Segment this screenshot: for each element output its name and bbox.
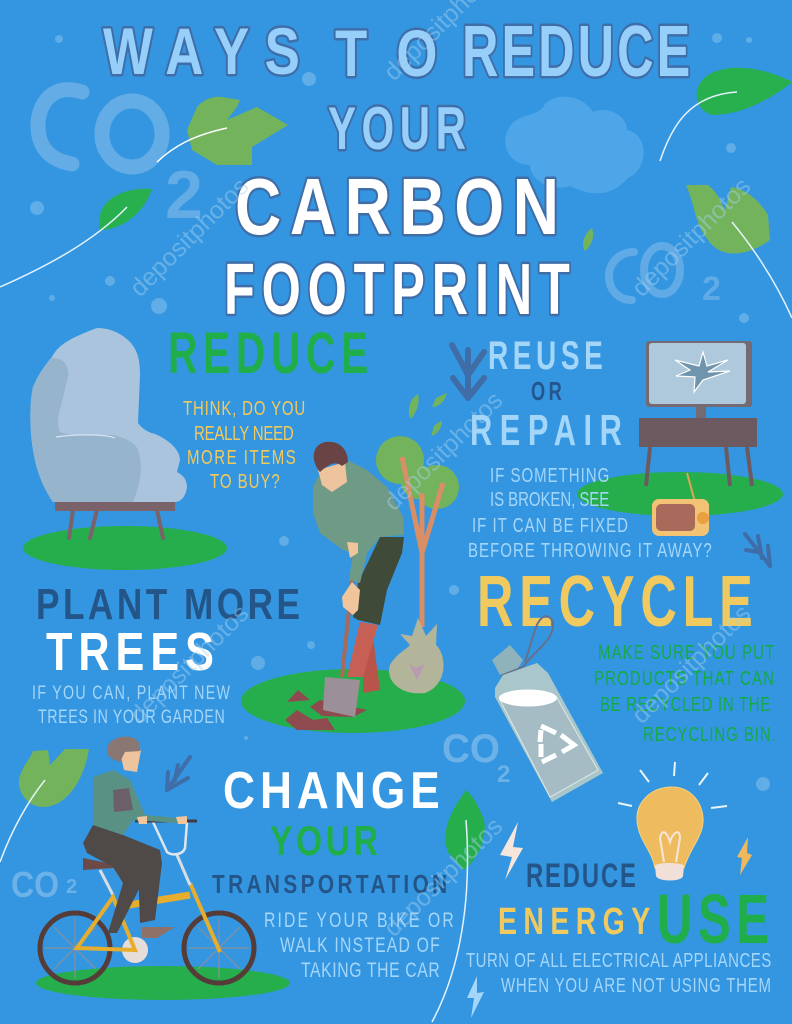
icon: tv on table	[577, 341, 783, 516]
co2 watermark right	[609, 246, 721, 308]
heading: reduce: REDUCE	[168, 321, 368, 386]
heading: change your transportation	[212, 762, 447, 899]
heading: reduce energy use: REDUCE	[526, 857, 636, 895]
co2 watermark right: 2	[702, 270, 721, 308]
text: transportation: RIDE YOUR BIKE OR	[264, 908, 454, 932]
icon: plant leaves	[409, 393, 447, 436]
leaf small left with stem	[0, 189, 152, 287]
depositphotos watermarks: depositphotos	[378, 812, 508, 942]
text: transportation: WALK INSTEAD OF	[280, 933, 440, 957]
heading: reduce energy use: ENERGY	[498, 901, 650, 943]
heading: change your transportation: YOUR	[270, 819, 378, 865]
text: repair: BEFORE THROWING IT AWAY?	[468, 539, 712, 562]
leaf right with stem	[686, 185, 792, 318]
heading: reduce energy use: USE	[657, 879, 769, 958]
title: FOOTPRINT	[224, 250, 570, 330]
heading: change your transportation: TRANSPORTATION	[212, 870, 447, 899]
heading: plant more trees: TREES	[46, 623, 214, 682]
heading: reuse or repair	[470, 334, 622, 455]
icon: dark plant right	[745, 534, 770, 566]
text: repair: IF IT CAN BE FIXED	[472, 514, 628, 537]
icon: lightning bolts	[467, 822, 752, 1018]
text: energy	[466, 949, 771, 997]
text: recycle: PRODUCTS THAT CAN	[594, 667, 774, 690]
armchair illustration	[23, 328, 227, 570]
text: repair	[468, 464, 712, 562]
heading: change your transportation: CHANGE	[223, 762, 440, 820]
text: energy: WHEN YOU ARE NOT USING THEM	[501, 974, 771, 997]
heading: reuse or repair: REUSE	[488, 334, 603, 378]
leaf bottom left with stem	[0, 749, 89, 862]
cloud	[505, 97, 644, 193]
heading: reduce energy use	[498, 857, 769, 958]
small leaf	[583, 228, 593, 251]
text: think: REALLY NEED	[194, 422, 294, 445]
leaf top right with stem	[660, 68, 792, 161]
icon: dark plant	[452, 345, 484, 398]
text: plant: IF YOU CAN, PLANT NEW	[32, 682, 230, 704]
depositphotos watermarks	[124, 0, 756, 942]
text: recycle: RECYCLING BIN.	[643, 723, 776, 746]
text: plant: TREES IN YOUR GARDEN	[38, 706, 225, 728]
leaf top left	[157, 97, 288, 165]
co2 watermark top left	[38, 90, 203, 233]
icon: radio	[652, 473, 709, 536]
text: repair: IS BROKEN, SEE	[490, 488, 609, 511]
title: YOUR	[328, 95, 466, 162]
title: REDUCE	[462, 12, 690, 92]
co2 watermark top left: 2	[165, 157, 203, 233]
text: plant	[32, 682, 230, 728]
cyclist on bike	[36, 737, 290, 1000]
text: think: MORE ITEMS	[187, 446, 296, 469]
text: recycle: BE RECYCLED IN THE	[600, 693, 770, 716]
heading: plant more trees: PLANT MORE	[36, 580, 300, 629]
heading: reuse or repair: OR	[531, 377, 562, 406]
heading: plant more trees	[36, 580, 300, 682]
title: WAYS	[103, 14, 300, 88]
text: think: THINK, DO YOU	[183, 397, 305, 420]
text: recycle: MAKE SURE YOU PUT	[598, 641, 774, 664]
person planting tree	[241, 436, 465, 733]
icon: bottle	[492, 616, 603, 802]
co2 watermark bottom left: CO	[11, 864, 59, 905]
title: TO	[335, 16, 437, 90]
depositphotos watermarks: depositphotos	[626, 599, 756, 729]
leaf bottom center with stem	[432, 790, 485, 1022]
text: think	[183, 397, 305, 493]
depositphotos watermarks: depositphotos	[378, 386, 508, 516]
text: think: TO BUY?	[210, 470, 280, 493]
depositphotos watermarks: depositphotos	[626, 172, 756, 302]
text: transportation: TAKING THE CAR	[301, 958, 440, 982]
co2 watermark center	[442, 727, 510, 788]
depositphotos watermarks: depositphotos	[124, 599, 254, 729]
text: energy: TURN OF ALL ELECTRICAL APPLIANCES	[466, 949, 771, 972]
icon: dark plant bottom	[167, 757, 190, 790]
title	[103, 12, 690, 330]
co2 watermark bottom left: 2	[66, 876, 77, 898]
title: CARBON	[235, 162, 559, 252]
heading: reuse or repair: REPAIR	[470, 407, 622, 455]
heading: recycle: RECYCLE	[477, 562, 753, 642]
text: repair: IF SOMETHING	[490, 464, 609, 487]
co2 watermark center: 2	[497, 761, 510, 788]
text: transportation	[264, 908, 454, 982]
depositphotos watermarks: depositphotos	[124, 172, 254, 302]
co2 watermark center: CO	[442, 727, 500, 771]
icon: lightbulb	[618, 762, 727, 880]
text: recycle	[594, 641, 776, 746]
